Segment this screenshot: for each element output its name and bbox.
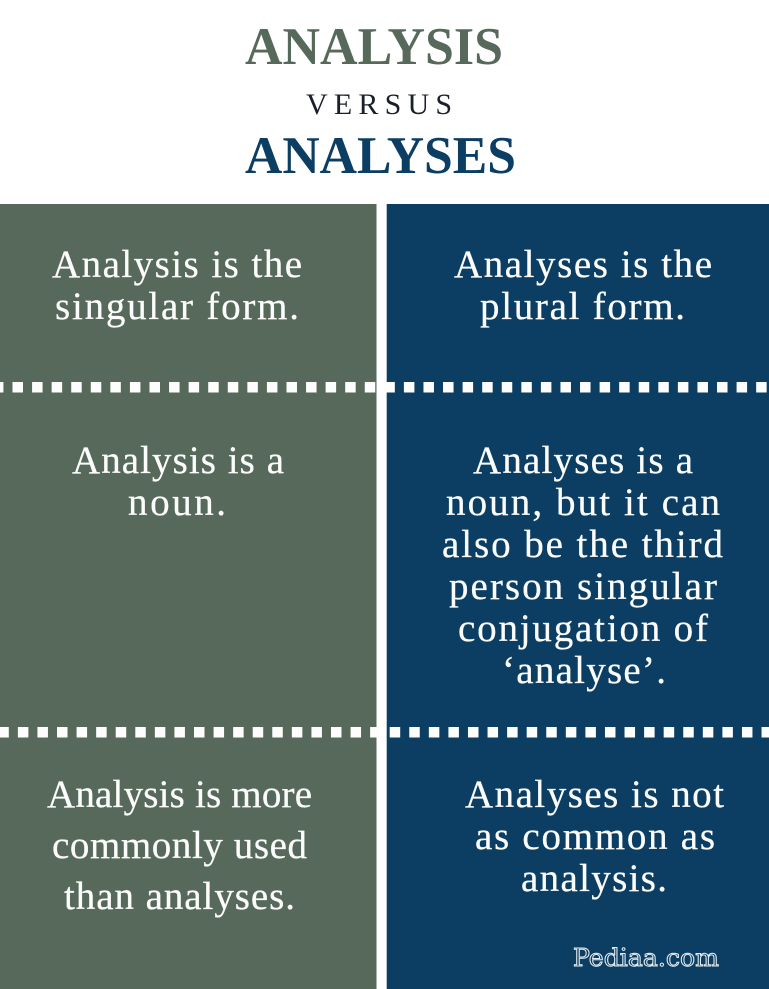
- title block: [245, 18, 516, 185]
- logo: Pediaa.com: Pediaa.com: [573, 944, 719, 972]
- text: singular form: Analysis is the: [52, 243, 302, 286]
- heading: Analyses: ANALYSES: [245, 127, 516, 185]
- text: more common: [47, 773, 312, 918]
- text: plural form: plural form.: [480, 285, 685, 328]
- text: noun or verb: ‘analyse’.: [502, 649, 666, 692]
- text: less common: as common as: [475, 815, 715, 858]
- text: noun: Analysis is a: [72, 439, 284, 482]
- text: singular form: [52, 243, 302, 328]
- text: noun or verb: also be the third: [442, 523, 724, 566]
- text: less common: Analyses is not: [465, 773, 724, 816]
- text: noun or verb: conjugation of: [458, 607, 708, 650]
- text: noun: noun.: [128, 481, 226, 524]
- text: more common: than analyses.: [64, 875, 295, 918]
- dotted divider: row one: [0, 382, 767, 392]
- text: more common: Analysis is more: [47, 773, 312, 816]
- panel: analysis column: [0, 204, 376, 989]
- text: less common: [465, 773, 724, 900]
- dotted divider: row two: [0, 727, 769, 738]
- text: noun or verb: noun, but it can: [446, 481, 720, 524]
- text: more common: commonly used: [52, 824, 308, 867]
- heading: Analysis: ANALYSIS: [245, 18, 503, 76]
- text: noun: [72, 439, 284, 524]
- column background: blue: [387, 204, 769, 989]
- panel: analyses column: [387, 204, 769, 989]
- text: plural form: [454, 243, 712, 328]
- heading: versus: VERSUS: [306, 88, 452, 121]
- text: singular form: singular form.: [55, 285, 299, 328]
- text: plural form: Analyses is the: [454, 243, 712, 286]
- text: noun or verb: person singular: [449, 565, 717, 608]
- text: noun or verb: Analyses is a: [473, 439, 693, 482]
- column background: green: [0, 204, 376, 989]
- text: less common: analysis.: [521, 857, 667, 900]
- text: noun or verb: [442, 439, 724, 692]
